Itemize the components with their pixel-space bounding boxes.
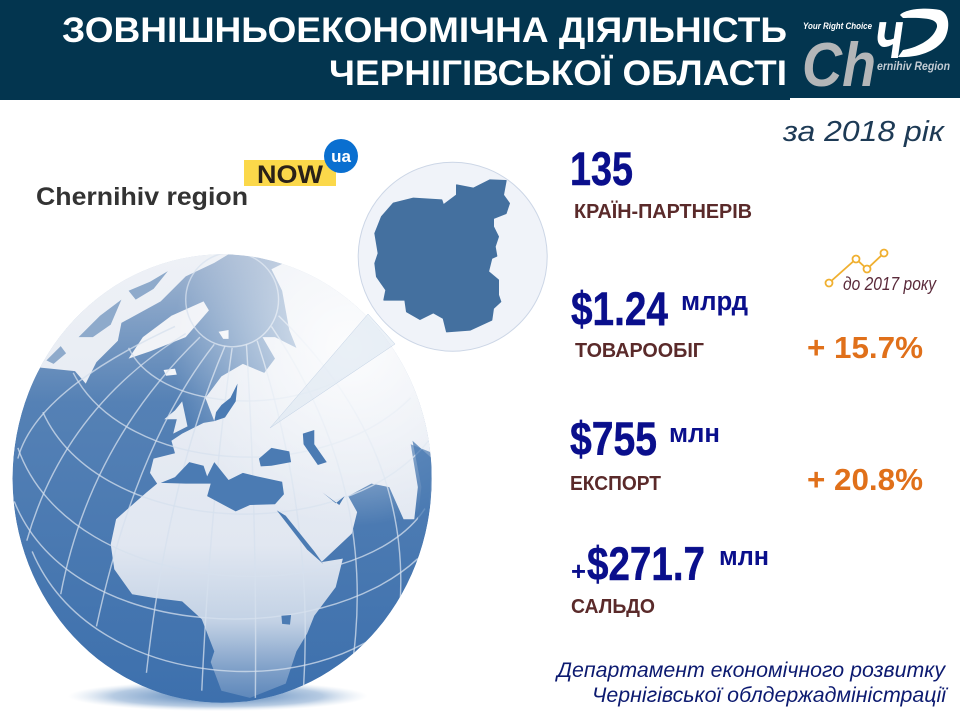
Persian Gulf (322, 492, 345, 505)
NOW ua badge (244, 139, 358, 189)
title: ЗОВНІШНЬОЕКОНОМІЧНА ДІЯЛЬНІСТЬ (62, 11, 787, 50)
Eurasia and Africa (111, 262, 446, 698)
Bay of Bengal (412, 441, 432, 519)
title (62, 11, 787, 93)
North America Arctic (40, 254, 228, 384)
land masses (21, 251, 446, 698)
stat: partner countries (570, 142, 752, 223)
stat: trade turnover (571, 282, 748, 362)
region name: Chernihiv region (36, 183, 248, 211)
Red Sea (277, 510, 323, 564)
UK (164, 401, 187, 434)
Baltic (214, 384, 237, 421)
stat: export: $755 (570, 412, 657, 465)
logo: Chernihiv region: Your Right Choice (803, 21, 872, 31)
Iceland (164, 369, 177, 376)
stat: balance: + (571, 556, 586, 586)
stat: balance: $271.7 (587, 537, 705, 590)
seas (161, 384, 432, 625)
period label: за 2018 рік (782, 116, 945, 148)
footer: department credit (555, 659, 948, 707)
stat: balance: млн (719, 541, 769, 571)
logo: Chernihiv region: Ch (802, 31, 876, 100)
change: turnover: + 15.7% (807, 330, 923, 365)
Black Sea (259, 448, 291, 466)
stat: export: млн (669, 418, 720, 448)
Canadian channels (46, 271, 168, 364)
callout wedge from Ukraine to the magnified circle (270, 314, 395, 428)
stat: export: ЕКСПОРТ (570, 473, 661, 495)
Greenland (129, 301, 209, 359)
graticule (14, 252, 429, 698)
stat: partner countries: 135 (570, 142, 633, 195)
title: ЧЕРНІГІВСЬКОЇ ОБЛАСТІ (329, 54, 787, 93)
NOW ua badge: NOW (257, 161, 323, 189)
stat: trade turnover: млрд (681, 286, 748, 316)
logo: Chernihiv region (802, 0, 950, 100)
stat: trade turnover: $1.24 (571, 282, 668, 335)
highlight (184, 254, 432, 517)
stat: export (570, 412, 720, 495)
footer: department credit: Чернігівської облдержадміністрації (592, 684, 948, 707)
comparison note: до 2017 року (843, 274, 937, 294)
stat: balance (571, 537, 769, 618)
Svalbard (219, 330, 229, 339)
icon: trend line (826, 250, 888, 286)
header banner (0, 0, 960, 100)
Mediterranean (161, 462, 284, 511)
stat: balance: САЛЬДО (571, 596, 655, 618)
NOW ua badge: ua (331, 147, 351, 166)
magnifier circle with Chernihiv region map (358, 162, 547, 351)
change: export: + 20.8% (807, 462, 923, 497)
Lake Victoria (281, 615, 291, 625)
globe illustration (12, 251, 446, 711)
Caspian (303, 430, 327, 465)
footer: department credit: Департамент економічного розвитку (555, 659, 947, 682)
logo: Chernihiv region: ernihiv Region (877, 61, 950, 73)
stat: partner countries: КРАЇН-ПАРТНЕРІВ (574, 200, 752, 223)
stat: trade turnover: ТОВАРООБІГ (575, 340, 704, 362)
